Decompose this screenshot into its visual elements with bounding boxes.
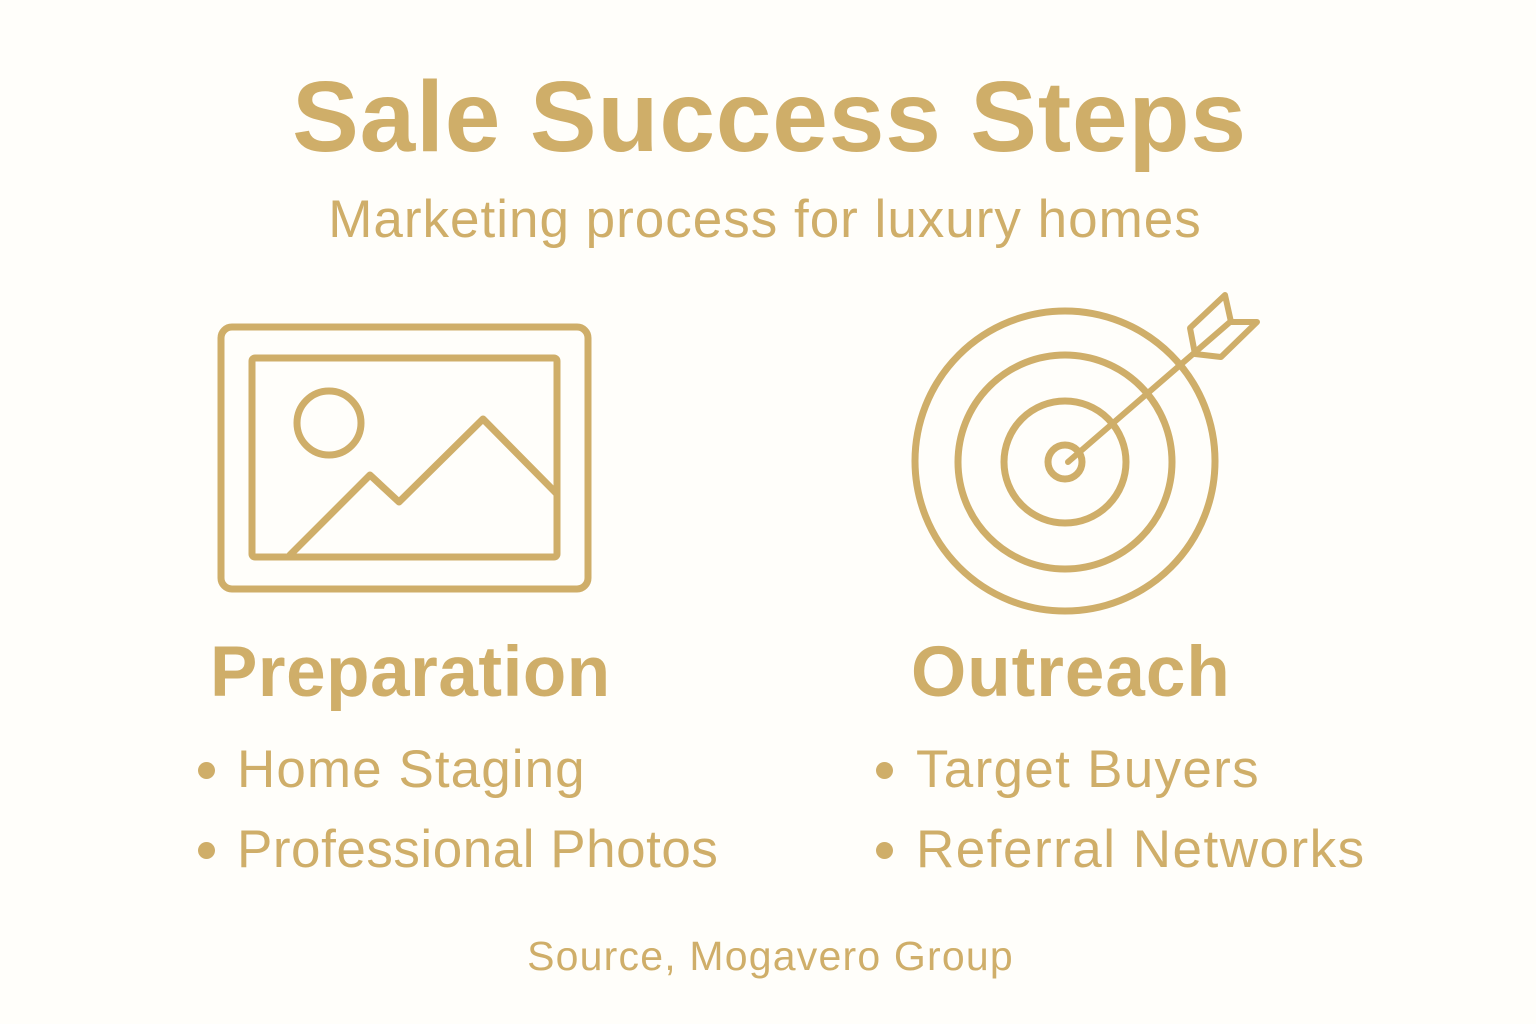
source note: Source, Mogavero Group xyxy=(527,933,1014,979)
subtitle: Marketing process for luxury homes xyxy=(328,190,1202,249)
heading: preparation: Preparation xyxy=(210,633,611,712)
bullet dot xyxy=(198,842,215,859)
list item: Referral Networks xyxy=(916,820,1366,879)
icon: picture frame xyxy=(221,327,588,589)
bullet dot xyxy=(198,762,215,779)
list item: Target Buyers xyxy=(916,740,1260,799)
icon: target with arrow xyxy=(915,295,1257,611)
title: Sale Success Steps xyxy=(292,61,1247,173)
bullet dot xyxy=(876,842,893,859)
list item: Home Staging xyxy=(237,740,586,799)
bullet dot xyxy=(876,762,893,779)
heading: outreach: Outreach xyxy=(911,633,1231,712)
list item: Professional Photos xyxy=(237,820,718,879)
